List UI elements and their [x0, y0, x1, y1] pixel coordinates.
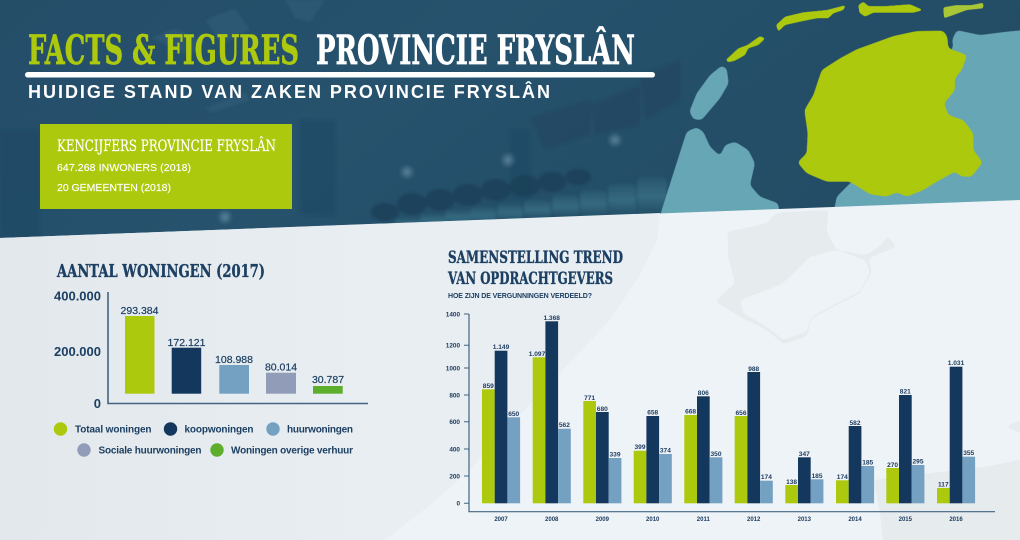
2011: 806 [698, 390, 709, 397]
y axis labels: 1000 [446, 365, 460, 372]
2009: 680 [597, 406, 608, 413]
title underline [25, 72, 655, 78]
map: provinces and islands [653, 2, 1020, 240]
2014: 2014 [848, 517, 862, 523]
map: Schiermonnikoog [943, 3, 983, 18]
bar chart: aantal woningen: 30.787 [312, 374, 344, 386]
y axis labels: 200 [449, 473, 460, 480]
2011 [684, 390, 722, 523]
2015: 2015 [899, 517, 913, 523]
legend: woningen [54, 422, 353, 457]
2010: 399 [634, 444, 646, 451]
2011: 668 [685, 408, 696, 416]
2009: 2009 [596, 517, 610, 523]
y axis labels: 0 [456, 501, 460, 508]
2008: 562 [559, 422, 570, 429]
2015: 295 [912, 458, 924, 466]
y axis labels [446, 311, 460, 508]
2015: 821 [900, 388, 911, 396]
2012: 2012 [747, 517, 761, 523]
map: Terschelling [776, 5, 846, 32]
2009 [583, 395, 621, 523]
2010: 2010 [646, 517, 660, 523]
2014: 174 [837, 474, 848, 481]
lower light panel background [0, 200, 1020, 540]
2013: 347 [799, 451, 810, 458]
2013: 138 [786, 479, 797, 486]
2012: 174 [761, 474, 772, 481]
subheading: vergunningen: HOE ZIJN DE VERGUNNINGEN VERDEELD? [448, 293, 592, 300]
map: Texel [689, 66, 729, 120]
2015: 270 [887, 462, 898, 469]
2007: 650 [508, 411, 520, 418]
2008 [529, 315, 571, 523]
2014 [836, 420, 874, 523]
2013 [785, 451, 823, 523]
y axis labels: 1200 [446, 343, 460, 350]
y axis labels: 800 [449, 392, 460, 399]
heading: aantal woningen: AANTAL WONINGEN (2017) [56, 262, 265, 282]
subtitle: HUIDIGE STAND VAN ZAKEN PROVINCIE FRYSLÂN [28, 81, 550, 102]
2007: 1.149 [493, 344, 510, 351]
2008: 1.097 [529, 351, 546, 358]
bar chart: aantal woningen: 0 [94, 396, 101, 411]
2007: 859 [483, 383, 494, 390]
legend: woningen: Woningen overige verhuur [231, 446, 353, 456]
title [28, 27, 635, 74]
2013: 2013 [798, 517, 812, 523]
2012: 656 [735, 410, 747, 417]
y axis labels: 600 [449, 419, 460, 426]
2010: 374 [660, 448, 671, 454]
2012 [735, 366, 773, 523]
map: Vlieland [726, 36, 765, 62]
title: PROVINCIE FRYSLÂN [316, 27, 635, 74]
2012: 988 [748, 366, 760, 373]
bar chart: aantal woningen [54, 288, 368, 411]
bar chart: aantal woningen: 80.014 [265, 362, 297, 374]
2016: 1.031 [948, 360, 965, 367]
map: Friesland [797, 31, 983, 197]
2008: 1.368 [543, 315, 560, 322]
gemeenten: 20 GEMEENTEN (2018) [57, 182, 171, 194]
2016 [937, 360, 975, 523]
legend: woningen: huurwoningen [287, 424, 353, 436]
y axis labels: 400 [449, 446, 460, 453]
2007 [482, 344, 520, 523]
2010 [634, 410, 672, 523]
2010: 658 [647, 410, 659, 416]
bar chart: aantal woningen: 172.121 [168, 337, 206, 349]
bar chart: aantal woningen: 108.988 [215, 354, 253, 366]
2011: 2011 [697, 517, 710, 523]
2016: 2016 [949, 517, 963, 523]
2016: 117 [938, 482, 949, 488]
heading: samenstelling trend: SAMENSTELLING TREND [448, 248, 623, 268]
panel: kencijfers [40, 124, 292, 209]
2009: 771 [584, 395, 595, 402]
bar chart: aantal woningen: 293.384 [121, 305, 159, 317]
2014: 582 [849, 420, 861, 427]
2011: 350 [710, 451, 722, 458]
title: FACTS & FIGURES [28, 27, 299, 74]
2013: 185 [811, 473, 823, 480]
2016: 355 [963, 450, 975, 457]
y axis labels: 1400 [446, 311, 460, 318]
map: Ameland [858, 2, 923, 17]
inwoners: 647.268 INWONERS (2018) [57, 162, 191, 174]
heading: samenstelling trend: VAN OPDRACHTGEVERS [447, 269, 613, 289]
bar chart: aantal woningen: 400.000 [54, 288, 101, 304]
legend: woningen: Sociale huurwoningen [98, 446, 202, 456]
bar chart: trend van opdrachtgevers [446, 311, 995, 523]
map: teal mainland [653, 27, 1020, 240]
2015 [886, 388, 924, 523]
bar chart: aantal woningen: 200.000 [54, 344, 101, 359]
2008: 2008 [545, 517, 559, 523]
header photo background [0, 0, 1020, 240]
2009: 339 [609, 452, 621, 458]
2007: 2007 [494, 517, 508, 523]
legend: woningen: Totaal woningen [75, 424, 152, 436]
legend: woningen: koopwoningen [184, 424, 254, 436]
kencijfers heading: KENCIJFERS PROVINCIE FRYSLÂN [57, 137, 276, 155]
chart axes [469, 314, 995, 512]
heading: samenstelling trend [447, 248, 623, 289]
2014: 185 [862, 460, 874, 466]
